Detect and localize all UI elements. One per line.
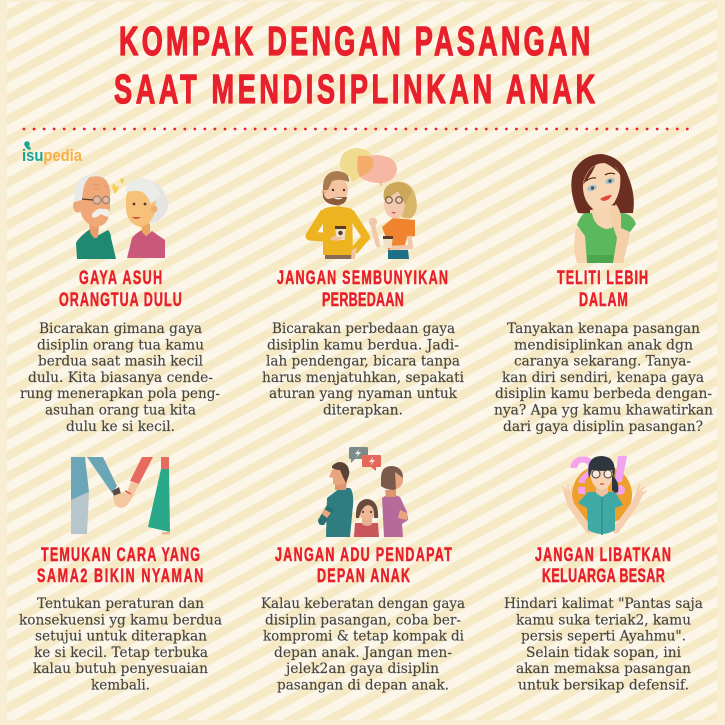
heading: JANGAN SEMBUNYIKAN	[277, 267, 448, 289]
heading	[59, 267, 182, 311]
body text: aturan yang nyaman untuk	[269, 386, 458, 402]
heading: TEMUKAN CARA YANG	[41, 544, 200, 566]
heading: ORANGTUA DULU	[59, 289, 182, 311]
body text: lah pendengar, bicara tanpa	[266, 354, 460, 370]
icon: couple talking with coffee	[310, 148, 417, 259]
icon: elderly couple	[73, 174, 168, 259]
icon: stressed woman: ?	[568, 445, 598, 506]
body text	[504, 596, 703, 694]
body text: disiplin kamu berdua. Jadi-	[267, 337, 459, 353]
body text: kompromi & tetap kompak di	[263, 629, 464, 645]
body text: mendisiplinkan anak dgn	[514, 337, 693, 353]
heading	[37, 544, 203, 587]
heading	[557, 267, 648, 311]
dotted divider	[24, 128, 688, 130]
body text	[261, 596, 465, 694]
body text	[19, 596, 222, 694]
heading: TELITI LEBIH	[557, 267, 648, 289]
heading: DALAM	[579, 289, 628, 311]
body text	[262, 321, 465, 418]
body text: Bicarakan gimana gaya	[39, 321, 202, 337]
body text	[20, 321, 220, 435]
title: SAAT MENDISIPLINKAN ANAK	[114, 68, 595, 112]
body text: Kalau keberatan dengan gaya	[261, 596, 465, 612]
body text: disiplin orang tua kamu	[37, 337, 204, 353]
body text: jelek2an gaya disiplin	[284, 661, 439, 677]
body text: disiplin pasangan, coba ber-	[265, 612, 461, 628]
body text: ke si kecil. Tetap terbuka	[34, 645, 208, 661]
panel: gaya asuh orangtua dulu	[20, 174, 220, 435]
panel: temukan cara yang sama2 bikin nyaman	[19, 457, 222, 694]
heading	[535, 544, 671, 587]
body text: Tanyakan kenapa pasangan	[507, 321, 700, 337]
body text: konsekuensi yg kamu berdua	[19, 612, 222, 628]
body text: kalau butuh penyesuaian	[33, 661, 208, 677]
panel: jangan libatkan keluarga besar	[504, 445, 703, 694]
heading: JANGAN LIBATKAN	[535, 544, 671, 566]
body text: depan anak. Jangan men-	[274, 645, 452, 661]
body text	[494, 321, 713, 435]
body text: setujui untuk diterapkan	[35, 629, 207, 645]
body text: kembali.	[91, 678, 150, 694]
heading	[277, 267, 448, 311]
heading: JANGAN ADU PENDAPAT	[275, 544, 452, 566]
body text: caranya sekarang. Tanya-	[514, 354, 691, 370]
heading	[275, 544, 452, 587]
body text: dulu ke si kecil.	[66, 419, 175, 435]
body text: disiplin kamu berbeda dengan-	[495, 386, 712, 402]
heading: KELUARGA BESAR	[542, 565, 665, 587]
logo: isupedia: isupedia	[22, 147, 83, 165]
icon: arguing parents and child	[318, 447, 408, 537]
body text: diterapkan.	[323, 402, 403, 418]
body text: dari gaya disiplin pasangan?	[503, 419, 703, 435]
heading: SAMA2 BIKIN NYAMAN	[37, 565, 203, 587]
body text: berdua saat masih kecil	[38, 354, 204, 370]
body text: harus menjatuhkan, sepakati	[262, 370, 465, 386]
body text: pasangan di depan anak.	[277, 678, 449, 694]
body text: Hindari kalimat "Pantas saja	[504, 596, 703, 612]
panel: jangan sembunyikan perbedaan	[262, 148, 465, 418]
icon: holding hands	[71, 457, 170, 534]
icon: thinking woman	[571, 154, 636, 263]
heading: GAYA ASUH	[79, 267, 162, 289]
body text: akan memaksa pasangan	[516, 661, 691, 677]
panel: jangan adu pendapat depan anak	[261, 447, 465, 694]
body text: untuk bersikap defensif.	[518, 678, 689, 694]
body text: rung menerapkan pola peng-	[20, 386, 220, 402]
body text: dulu. Kita biasanya cende-	[28, 370, 213, 386]
body text: asuhan orang tua kita	[45, 402, 196, 418]
body text: kamu suka teriak2, kamu	[516, 612, 691, 628]
title	[114, 20, 595, 112]
body text: Tentukan peraturan dan	[37, 596, 204, 612]
icon: stressed woman	[563, 445, 646, 535]
panel: teliti lebih dalam	[494, 154, 713, 435]
title: KOMPAK DENGAN PASANGAN	[119, 20, 590, 64]
body text: persis seperti Ayahmu".	[521, 629, 686, 645]
body text: nya? Apa yg kamu khawatirkan	[494, 402, 713, 418]
heading: PERBEDAAN	[322, 289, 404, 311]
body text: Selain tidak sopan, ini	[526, 645, 682, 661]
body text: kan diri sendiri, kenapa gaya	[502, 370, 704, 386]
heading: DEPAN ANAK	[317, 565, 410, 587]
body text: Bicarakan perbedaan gaya	[272, 321, 455, 337]
